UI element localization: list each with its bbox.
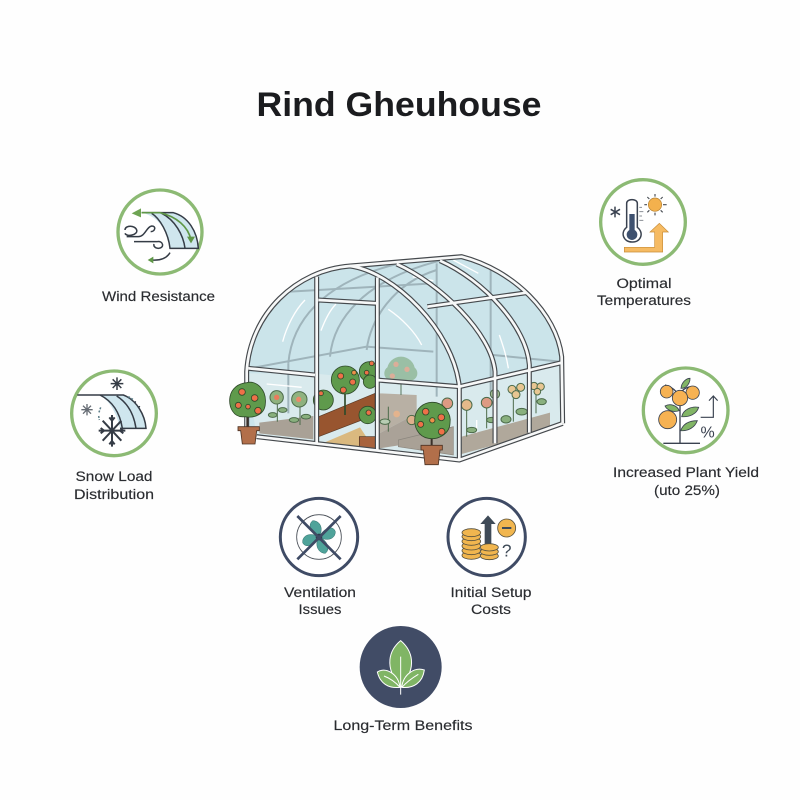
label (74, 469, 154, 502)
item: long-term benefits (334, 626, 473, 733)
icon: fruit plant with percent (643, 368, 728, 453)
label: Initial Setup (450, 585, 532, 600)
back frame (250, 261, 560, 413)
label: Ventilation (284, 585, 356, 600)
label (450, 585, 532, 617)
label: Snow Load (76, 469, 152, 484)
item: optimal temperatures (597, 180, 691, 308)
icon: snow on greenhouse (72, 371, 156, 456)
icon: crossed-out fan (280, 498, 358, 576)
item: snow load distribution (72, 371, 156, 502)
label (284, 585, 356, 617)
icon: thermometer and sun (601, 180, 685, 264)
potted tree right (415, 402, 450, 465)
label (597, 276, 691, 308)
background plants (384, 357, 417, 395)
label: (uto 25%) (654, 483, 720, 498)
label: Optimal (616, 276, 672, 291)
icon: leaf badge (360, 626, 442, 708)
tree in doorway (313, 361, 379, 424)
label: Wind Resistance (102, 289, 215, 304)
item: ventilation issues (280, 498, 358, 617)
label: Issues (298, 602, 342, 617)
item: increased plant yield (613, 368, 759, 498)
icon: coins, arrow and minus: ? (502, 541, 511, 561)
label (613, 465, 759, 498)
raised beds (259, 416, 313, 439)
glass body (245, 256, 563, 460)
label: Long-Term Benefits (334, 718, 473, 733)
item: initial setup costs (448, 498, 532, 617)
flower plants (268, 382, 546, 437)
label: Distribution (74, 487, 154, 502)
icon: wind over greenhouse (118, 190, 202, 274)
item: wind resistance (102, 190, 215, 304)
potted tree left (230, 382, 265, 444)
icon: fruit plant with percent: % (701, 424, 715, 441)
label: Costs (471, 602, 511, 617)
greenhouse illustration (230, 256, 563, 465)
title: Rind Gheuhouse (256, 86, 542, 124)
label: Increased Plant Yield (613, 465, 759, 480)
frame front (247, 257, 563, 460)
label: Temperatures (597, 293, 691, 308)
glass highlights (267, 260, 508, 448)
